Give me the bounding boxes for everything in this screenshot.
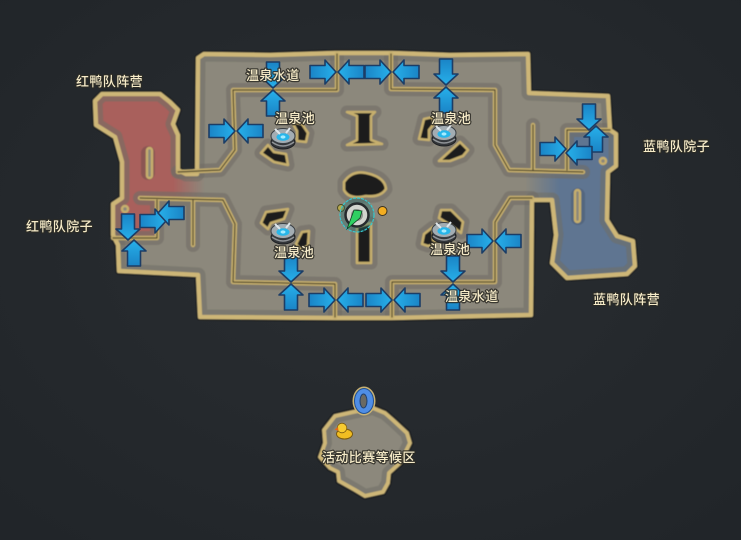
icon: small marker bbox=[338, 204, 344, 212]
label: bottom water channel: 温泉水道 bbox=[445, 289, 499, 304]
label: blue team camp: 蓝鸭队阵营 bbox=[593, 292, 660, 307]
icon: rubber duck bbox=[334, 423, 352, 439]
icon: portal bbox=[352, 386, 376, 416]
label: bottom right hot spring: 温泉池 bbox=[430, 242, 470, 257]
icon: hot spring top left bbox=[271, 128, 295, 149]
label: blue team yard: 蓝鸭队院子 bbox=[643, 139, 710, 154]
map shadow bands bbox=[95, 53, 635, 318]
label: waiting area: 活动比赛等候区 bbox=[322, 450, 416, 465]
red team base zone bbox=[95, 94, 205, 238]
base pillars bbox=[122, 148, 606, 222]
map outer outline bbox=[95, 53, 635, 318]
icon: hot spring bottom left bbox=[271, 223, 295, 244]
main arena map bbox=[95, 53, 635, 318]
icon: orange marker bbox=[378, 206, 387, 216]
label: top water channel: 温泉水道 bbox=[246, 68, 300, 83]
label: bottom left hot spring: 温泉池 bbox=[274, 245, 314, 260]
icon: hot spring top right bbox=[432, 125, 456, 146]
blue team base zone bbox=[525, 130, 635, 278]
icon: player marker bbox=[340, 198, 374, 232]
icon: hot spring bottom right bbox=[432, 222, 456, 243]
label: red team camp: 红鸭队阵营 bbox=[76, 74, 143, 89]
label: top right hot spring: 温泉池 bbox=[431, 111, 471, 126]
label: red team yard: 红鸭队院子 bbox=[26, 219, 93, 234]
interior walls bbox=[113, 54, 610, 317]
arrows: one-way water channels bbox=[116, 59, 608, 312]
obstacles bbox=[261, 112, 468, 263]
waiting island bbox=[320, 408, 410, 496]
label: top left hot spring: 温泉池 bbox=[275, 111, 315, 126]
